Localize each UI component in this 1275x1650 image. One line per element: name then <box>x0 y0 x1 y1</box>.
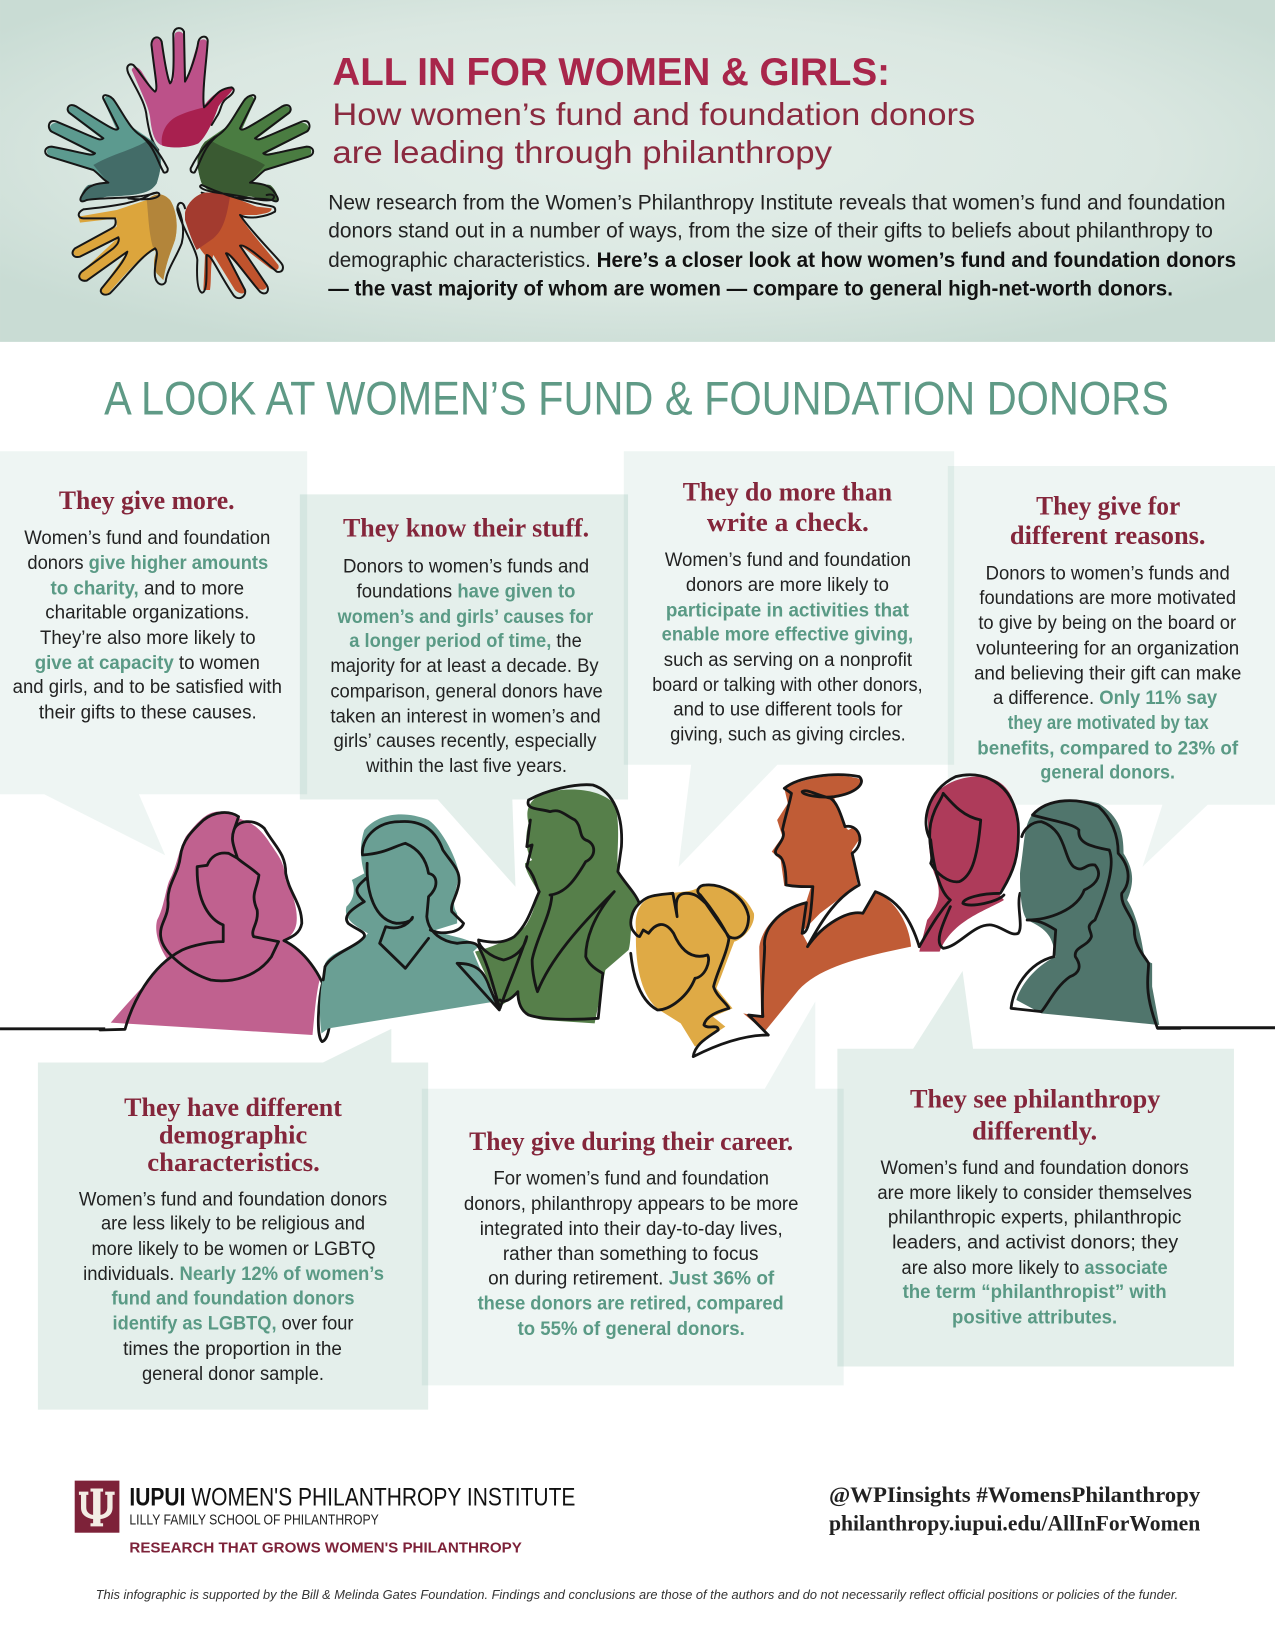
person: green man <box>475 785 639 1023</box>
panel: they give for different reasons <box>948 466 1275 867</box>
body text: comparison, general donors have <box>330 681 603 702</box>
body text: their gifts to these causes. <box>39 702 257 723</box>
body text: foundations are more motivated <box>979 588 1236 609</box>
organisation name: IUPUI WOMEN'S PHILANTHROPY INSTITUTE <box>129 1483 575 1511</box>
body text: times the proportion in the <box>123 1339 342 1360</box>
intro text: — the vast majority of whom are women — compare to general high-net-worth donors. <box>328 278 1173 301</box>
body text: are less likely to be religious and <box>101 1214 365 1235</box>
body text: to give by being on the board or <box>978 613 1236 634</box>
speech bubble <box>624 451 954 867</box>
body text: benefits, compared to 23% of <box>977 738 1239 759</box>
body text: donors are more likely to <box>686 575 889 596</box>
body text: board or talking with other donors, <box>652 675 923 696</box>
icon: circle of five hands <box>45 28 313 298</box>
body text: Women’s fund and foundation <box>665 550 911 571</box>
body text: Donors to women’s funds and <box>343 556 589 577</box>
body text: foundations have given to <box>357 582 575 603</box>
body text: participate in activities that <box>666 600 910 621</box>
body text <box>330 556 603 777</box>
heading: differently. <box>972 1116 1097 1145</box>
body text: philanthropic experts, philanthropic <box>888 1207 1181 1228</box>
body text: enable more effective giving, <box>662 625 913 646</box>
icon: pink hand <box>127 28 234 150</box>
body text: these donors are retired, compared <box>478 1294 784 1315</box>
body text: and to use different tools for <box>673 699 903 720</box>
body text <box>652 550 923 746</box>
body text: women’s and girls’ causes for <box>337 607 594 628</box>
panel: they give more <box>0 451 307 855</box>
school name: LILLY FAMILY SCHOOL OF PHILANTHROPY <box>129 1512 379 1528</box>
heading <box>124 1093 342 1177</box>
intro text <box>328 191 1236 301</box>
body text: Donors to women’s funds and <box>986 564 1230 585</box>
panel: they see philanthropy differently <box>837 971 1234 1366</box>
speech bubble <box>837 971 1234 1366</box>
body text: are also more likely to associate <box>902 1258 1168 1279</box>
person: yellow woman <box>631 885 768 1057</box>
heading <box>683 478 892 537</box>
body text: leaders, and activist donors; they <box>892 1233 1179 1254</box>
body text: to charity, and to more <box>51 578 244 599</box>
body text: the term “philanthropist” with <box>903 1282 1167 1303</box>
icon: yellow hand <box>73 193 183 295</box>
icon: green hand <box>191 95 313 202</box>
body text: general donors. <box>1040 762 1175 783</box>
intro text: donors stand out in a number of ways, from the size of their gifts to beliefs about philanthropy to <box>328 220 1213 243</box>
body text: Women’s fund and foundation donors <box>881 1158 1189 1179</box>
header band <box>0 0 1275 342</box>
body text: Women’s fund and foundation <box>24 528 270 549</box>
body text: They’re also more likely to <box>40 628 256 649</box>
intro text: New research from the Women’s Philanthropy Institute reveals that women’s fund and foundation <box>328 191 1226 214</box>
intro text: demographic characteristics. Here’s a closer look at how women’s fund and foundation donors <box>328 249 1236 272</box>
body text: to 55% of general donors. <box>518 1319 745 1340</box>
body text: giving, such as giving circles. <box>670 725 906 746</box>
subtitle: How women’s fund and foundation donors <box>332 96 975 132</box>
panel: they do more than write a check <box>624 451 954 867</box>
speech bubble <box>948 466 1275 867</box>
body text: a difference. Only 11% say <box>993 688 1218 709</box>
body text: they are motivated by tax <box>1008 713 1209 734</box>
heading: They give more. <box>59 486 235 515</box>
body text: general donor sample. <box>142 1364 324 1385</box>
heading: They see philanthropy <box>910 1085 1160 1114</box>
illustration: row of people left <box>100 785 639 1042</box>
body text: individuals. Nearly 12% of women’s <box>83 1264 384 1285</box>
body text: integrated into their day-to-day lives, <box>480 1219 783 1240</box>
baseline segments <box>0 1028 1275 1029</box>
heading <box>1010 491 1206 550</box>
body text: a longer period of time, the <box>349 631 582 652</box>
body text: donors, philanthropy appears to be more <box>464 1194 798 1215</box>
body text: charitable organizations. <box>45 603 249 624</box>
footer: social handles and url: philanthropy.iupui.edu/AllInForWomen <box>829 1511 1200 1536</box>
body text: donors give higher amounts <box>27 553 268 574</box>
panel: they have different demographic characteristics <box>38 1029 428 1410</box>
body text: more likely to be women or LGBTQ <box>92 1239 376 1260</box>
body text: identify as LGBTQ, over four <box>113 1314 353 1335</box>
heading: They do more than <box>683 478 892 507</box>
body text: majority for at least a decade. By <box>330 656 599 677</box>
footer: social handles and url <box>829 1482 1200 1536</box>
heading: They have different <box>124 1093 342 1122</box>
footer: social handles and url: @WPIinsights #WomensPhilanthropy <box>829 1482 1200 1508</box>
heading: They give for <box>1036 491 1181 520</box>
body text: For women’s fund and foundation <box>493 1169 769 1190</box>
body text: are more likely to consider themselves <box>877 1183 1192 1204</box>
person: pink woman <box>100 812 330 1042</box>
body text: within the last five years. <box>365 756 567 777</box>
title: ALL IN FOR WOMEN & GIRLS: <box>332 51 890 94</box>
body text <box>974 564 1241 783</box>
speech bubble <box>38 1029 428 1410</box>
body text: and believing their gift can make <box>974 664 1241 685</box>
speech bubble <box>300 494 628 887</box>
body text: on during retirement. Just 36% of <box>488 1268 775 1289</box>
icon: teal hand <box>45 95 168 202</box>
heading: They know their stuff. <box>343 513 589 542</box>
icon: IU trident <box>75 1481 119 1533</box>
body text <box>877 1158 1192 1328</box>
heading: write a check. <box>707 508 869 537</box>
panel: they give during their career <box>422 1001 844 1385</box>
person: crimson woman <box>919 775 1020 952</box>
body text: taken an interest in women’s and <box>330 707 601 728</box>
person: teal woman <box>320 814 499 1033</box>
heading: different reasons. <box>1010 521 1206 550</box>
person: orange man <box>743 775 919 1035</box>
panel: they know their stuff <box>300 494 628 887</box>
funder note: This infographic is supported by the Bill & Melinda Gates Foundation. Findings and conclusions are those of the authors and do not necessarily reflect official positions or policies of the funder. <box>96 1588 1178 1602</box>
body text: rather than something to focus <box>503 1244 758 1265</box>
illustration: row of people right <box>631 775 1180 1057</box>
body text: and girls, and to be satisfied with <box>13 677 282 698</box>
person: dark teal woman <box>1011 800 1180 1028</box>
icon: orange hand <box>177 185 283 298</box>
body text: Women’s fund and foundation donors <box>79 1190 387 1211</box>
body text <box>464 1169 798 1340</box>
speech bubble <box>0 451 307 855</box>
body text: positive attributes. <box>952 1307 1117 1328</box>
subtitle: are leading through philanthropy <box>332 134 832 170</box>
subtitle <box>332 96 975 170</box>
tagline: RESEARCH THAT GROWS WOMEN'S PHILANTHROPY <box>129 1541 522 1557</box>
body text: such as serving on a nonprofit <box>664 650 913 671</box>
heading: characteristics. <box>147 1148 320 1177</box>
heading <box>910 1085 1160 1145</box>
body text <box>13 528 282 723</box>
body text: give at capacity to women <box>35 653 260 674</box>
body text <box>79 1190 387 1385</box>
body text: fund and foundation donors <box>112 1288 355 1309</box>
body text: volunteering for an organization <box>976 638 1239 659</box>
speech bubble <box>422 1001 844 1385</box>
heading: They give during their career. <box>469 1127 793 1156</box>
heading: demographic <box>159 1120 308 1149</box>
footer: logo <box>75 1481 575 1557</box>
body text: girls’ causes recently, especially <box>333 731 597 752</box>
